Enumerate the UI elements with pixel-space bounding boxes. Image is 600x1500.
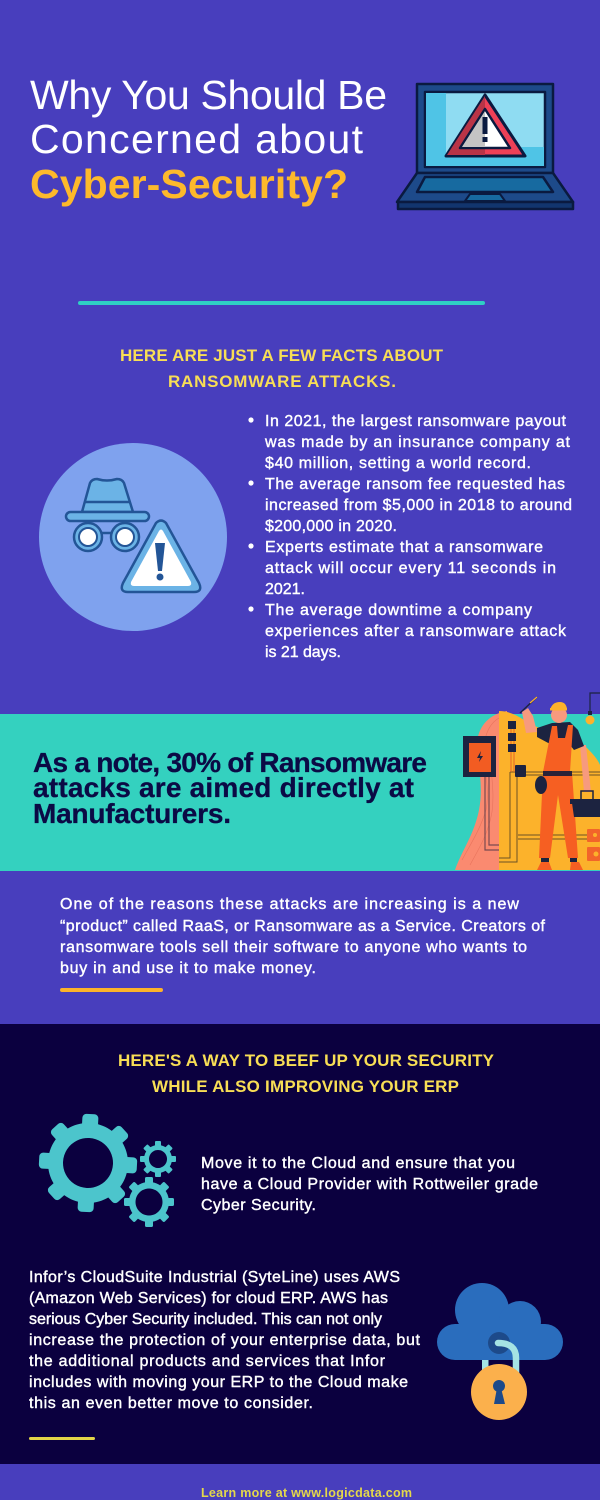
text block: move to the cloud: Cyber Security. bbox=[201, 1197, 316, 1214]
bullet 2 bbox=[248, 476, 572, 535]
small top gear bbox=[140, 1141, 176, 1177]
panel: dark security section bbox=[0, 1024, 600, 1464]
bullet 4: experiences after a ransomware attack bbox=[265, 623, 567, 640]
accent line bbox=[29, 1437, 95, 1440]
bullet 4 bbox=[248, 602, 567, 661]
callout: manufacturers note bbox=[33, 747, 427, 829]
text block: RaaS explanation: One of the reasons these attacks are increasing is a new bbox=[60, 896, 519, 913]
bullet 1: In 2021, the largest ransomware payout bbox=[265, 413, 567, 430]
bullet 3: Experts estimate that a ransomware bbox=[265, 539, 543, 556]
big gear bbox=[37, 1112, 139, 1214]
text block: Infor CloudSuite: includes with moving your ERP to the Cloud make bbox=[29, 1374, 408, 1391]
icon: laptop with warning triangle bbox=[397, 84, 573, 209]
bullet 4: The average downtime a company bbox=[265, 602, 532, 619]
bullet 3 bbox=[248, 539, 556, 598]
bullet 3: attack will occur every 11 seconds in bbox=[265, 560, 556, 577]
heading: ransomware facts: RANSOMWARE ATTACKS. bbox=[168, 372, 396, 391]
footer link: Learn more at www.logicdata.com bbox=[201, 1486, 412, 1500]
heading: beef up security bbox=[118, 1051, 495, 1096]
bullet 2: The average ransom fee requested has bbox=[265, 476, 565, 493]
bullet 2: increased from $5,000 in 2018 to around bbox=[265, 497, 572, 514]
bullet 3: 2021. bbox=[265, 581, 305, 598]
text block: Infor CloudSuite: this an even better move to consider. bbox=[29, 1395, 313, 1412]
text block: Infor CloudSuite bbox=[29, 1269, 421, 1412]
callout: manufacturers note: As a note, 30% of Ransomware bbox=[33, 747, 427, 778]
panel: manufacturers note band bbox=[0, 714, 600, 871]
bullet 1: $40 million, setting a world record. bbox=[265, 455, 531, 472]
title: Cyber-Security? bbox=[30, 161, 348, 207]
text block: move to the cloud: have a Cloud Provider with Rottweiler grade bbox=[201, 1176, 538, 1193]
heading: ransomware facts: HERE ARE JUST A FEW FACTS ABOUT bbox=[120, 346, 444, 365]
icon: gears bbox=[37, 1112, 176, 1227]
divider bbox=[78, 301, 485, 305]
text block: Infor CloudSuite: Infor’s CloudSuite Industrial (SyteLine) uses AWS bbox=[29, 1269, 400, 1286]
bullet 2: $200,000 in 2020. bbox=[265, 518, 397, 535]
text block: RaaS explanation: ransomware tools sell their software to anyone who wants to bbox=[60, 939, 527, 956]
text block: move to the cloud bbox=[201, 1155, 538, 1214]
bullet 1 bbox=[248, 413, 571, 472]
text block: Infor CloudSuite: serious Cyber Security included. This can not only bbox=[29, 1311, 382, 1328]
accent line bbox=[60, 988, 163, 992]
title: Why You Should Be bbox=[30, 72, 387, 118]
text block: Infor CloudSuite: increase the protection of your enterprise data, but bbox=[29, 1332, 421, 1349]
icon: cloud with padlock bbox=[437, 1283, 563, 1420]
text block: Infor CloudSuite: the additional products and services that Infor bbox=[29, 1353, 386, 1370]
text block: Infor CloudSuite: (Amazon Web Services) for cloud ERP. AWS has bbox=[29, 1290, 388, 1307]
heading: ransomware facts bbox=[120, 346, 444, 391]
bullet list: ransomware facts bbox=[248, 413, 572, 661]
callout: manufacturers note: Manufacturers. bbox=[33, 798, 231, 829]
text block: RaaS explanation bbox=[60, 896, 546, 977]
illustration: electrician worker bbox=[455, 693, 600, 870]
title: Concerned about bbox=[30, 116, 364, 162]
title bbox=[30, 72, 387, 207]
lower gear bbox=[124, 1177, 174, 1227]
text block: RaaS explanation: buy in and use it to make money. bbox=[60, 960, 316, 977]
icon: spy and warning in circle bbox=[39, 443, 227, 631]
bullet 1: was made by an insurance company at bbox=[264, 434, 571, 451]
bullet 4: is 21 days. bbox=[265, 644, 341, 661]
heading: beef up security: HERE'S A WAY TO BEEF UP YOUR SECURITY bbox=[118, 1051, 495, 1070]
heading: beef up security: WHILE ALSO IMPROVING YOUR ERP bbox=[152, 1077, 459, 1096]
callout: manufacturers note: attacks are aimed directly at bbox=[33, 772, 414, 803]
text block: RaaS explanation: “product” called RaaS, or Ransomware as a Service. Creators of bbox=[60, 918, 546, 935]
text block: move to the cloud: Move it to the Cloud and ensure that you bbox=[201, 1155, 515, 1172]
